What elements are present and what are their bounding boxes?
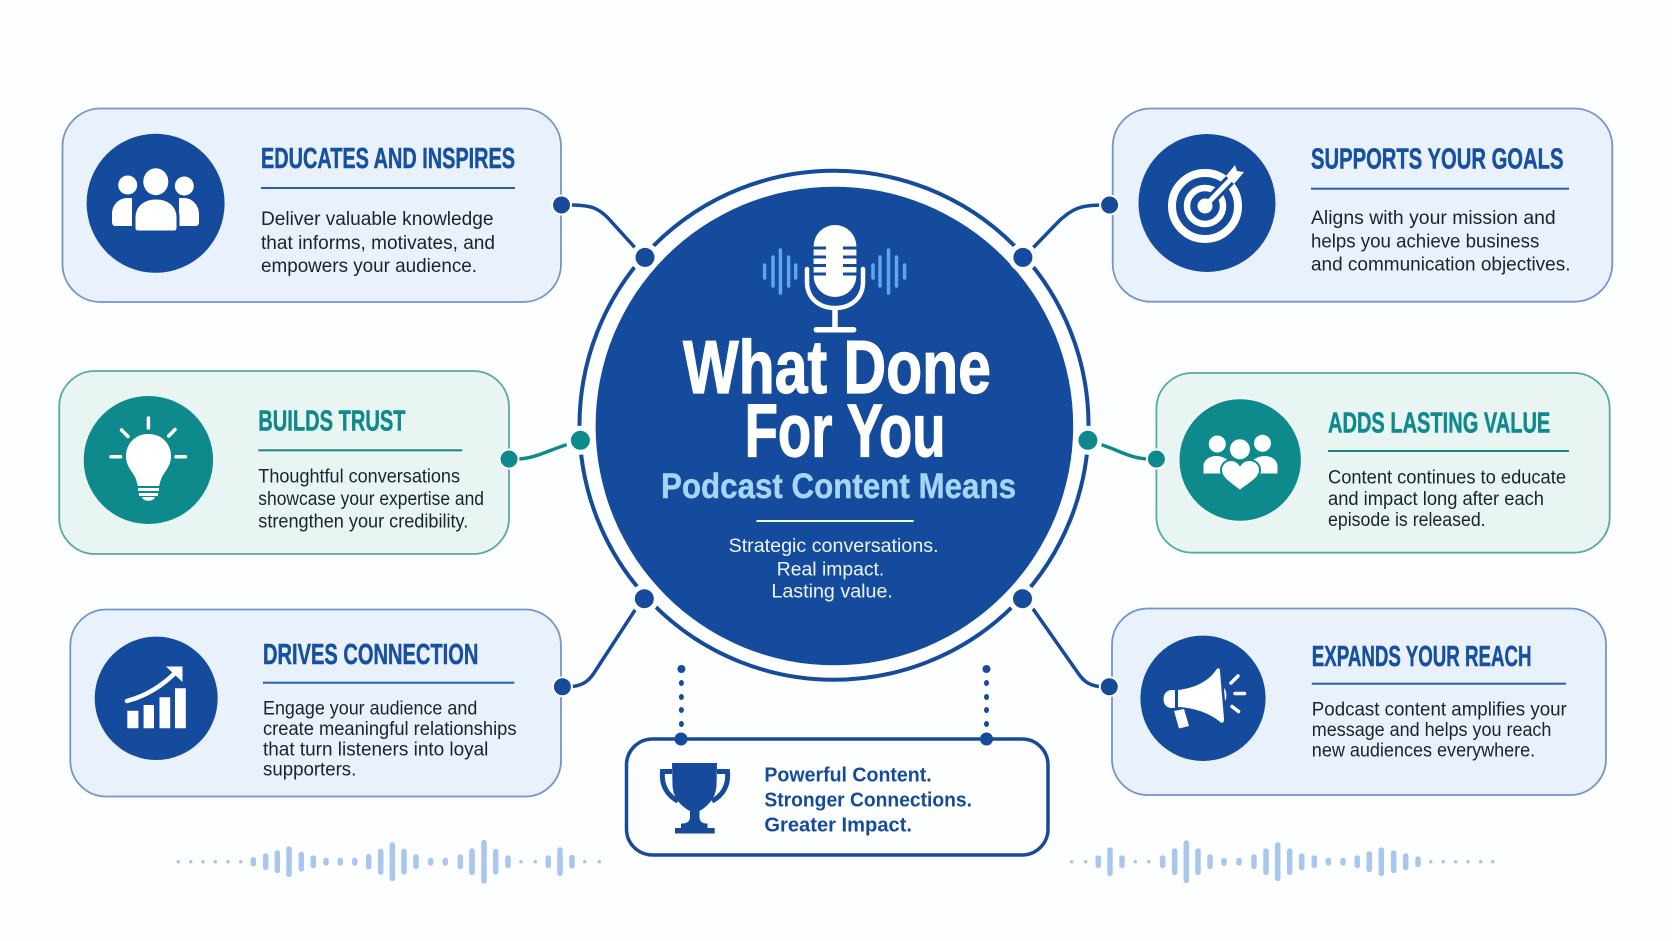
body text [258,467,484,532]
title [683,325,991,472]
connector: supports to hub [1030,205,1103,251]
icon: trophy [662,763,728,834]
subtitle: Podcast Content Means [661,467,1016,506]
callout text: Powerful Content. [764,765,932,787]
body text: supporters. [263,760,356,781]
body text: Content continues to educate [1328,467,1566,488]
body text: create meaningful relationships [263,719,516,740]
body text: empowers your audience. [261,256,477,277]
body text: strengthen your credibility. [258,511,468,532]
body text: episode is released. [1328,510,1486,531]
connector dot: expands reach card [1100,677,1119,696]
title: What Done [683,325,991,409]
title: For You [745,388,946,472]
panel: expands your reach [1112,608,1606,795]
connector dot: lasting value card [1147,450,1166,468]
heading: EXPANDS YOUR REACH [1312,641,1532,673]
heading: SUPPORTS YOUR GOALS [1311,143,1564,175]
heading: EDUCATES AND INSPIRES [261,143,515,175]
hub ring nodes [568,245,1100,611]
callout text: Stronger Connections. [764,790,972,812]
icon: microphone with sound waves [765,225,905,332]
body text [1328,467,1566,531]
icon: target with arrow [1138,134,1276,272]
tagline [729,536,939,603]
tagline: Strategic conversations. [729,536,939,557]
body text: showcase your expertise and [258,489,484,510]
body text: Aligns with your mission and [1311,208,1556,229]
body text [263,698,516,781]
callout text [764,765,972,837]
audio waveform: left [178,842,599,881]
body text: that turn listeners into loyal [263,740,488,761]
icon: growth chart [95,637,218,760]
panel: educates and inspires [62,108,561,302]
callout: powerful content [626,732,1048,855]
body text: message and helps you reach [1312,720,1551,741]
body text: and communication objectives. [1311,255,1570,276]
callout text: Greater Impact. [764,815,912,837]
panel: supports your goals [1113,108,1612,302]
central hub [568,171,1100,680]
body text [1311,208,1570,276]
dotted connector: right [982,665,990,727]
panel: builds trust [59,371,509,554]
body text: Podcast content amplifies your [1312,699,1567,720]
heading: DRIVES CONNECTION [263,639,478,671]
icon: people group [87,134,225,273]
icon: megaphone [1140,636,1266,761]
panel: drives connection [70,610,561,796]
connector: educates to hub [568,205,638,251]
connector: drives connection to hub [568,607,637,687]
body text: helps you achieve business [1311,232,1539,253]
connector dot: builds trust card [500,450,518,468]
tagline: Real impact. [777,559,884,580]
connector: expands reach to hub [1031,606,1103,687]
panel: adds lasting value [1156,373,1610,553]
body text [261,209,495,277]
heading: ADDS LASTING VALUE [1328,408,1550,440]
tagline: Lasting value. [771,582,893,603]
body text: Engage your audience and [263,698,477,719]
body text [1312,699,1567,762]
dotted connector: left [677,665,685,727]
body text: Thoughtful conversations [258,467,460,488]
body text: that informs, motivates, and [261,233,495,254]
body text: new audiences everywhere. [1312,741,1535,762]
heading: BUILDS TRUST [258,406,406,438]
body text: Deliver valuable knowledge [261,209,494,230]
icon: group with heart [1180,399,1301,521]
connector: lasting value to hub [1096,443,1150,459]
connector dot: educates card [552,196,571,214]
connector dot: supports card [1100,196,1119,214]
connector: builds trust to hub [516,443,572,459]
body text: and impact long after each [1328,489,1544,510]
audio waveform: right [1072,843,1493,880]
connector dot: drives connection card [553,677,572,696]
icon: light bulb [84,396,213,524]
